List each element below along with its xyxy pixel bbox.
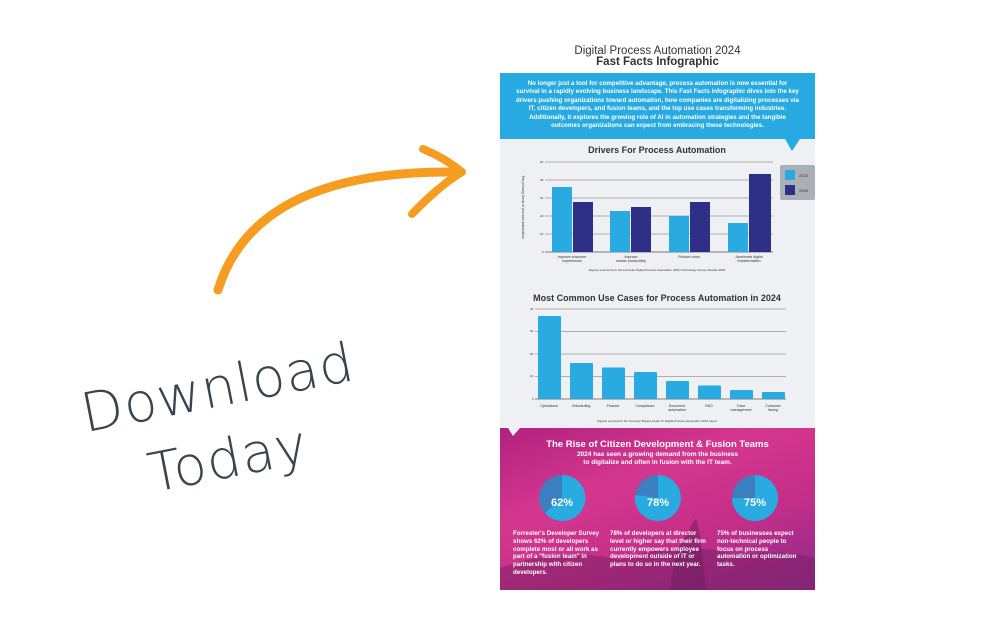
infographic [500, 40, 815, 590]
chart: drivers: Improve [625, 255, 637, 259]
intro box: No longer just a tool for competitive advantage, process automation is now essential for survival in a rapidly evolving business landscape. This Fast Facts infographic dives into the key drivers pushing organizations toward automation, how companies are digitalizing processes via IT, citizen developers, and fusion teams, and the top use cases transforming industries. Additionally, it explores the growing role of AI in automation strategies and the tangible outcomes organizations can expect from embracing these technologies. [516, 80, 799, 129]
stat texts: Forrester's Developer Survey shows 62% of developers complete most or all work as part of a "fusion team" in partnership with citizen developers. [513, 530, 599, 576]
pie 62%: 62% [551, 497, 573, 509]
title: Fast Facts Infographic [596, 56, 719, 68]
chart: drivers: Accelerate digital [735, 255, 763, 259]
panel: citizen development: 75% of businesses expect non-technical people to focus on process automation or optimization tasks. [717, 530, 796, 568]
chart: drivers: The primary focus of process automation [521, 175, 525, 239]
chart: drivers: 0 [542, 250, 544, 254]
chart: drivers: transformation [738, 259, 760, 263]
chart: use cases: 40 [530, 307, 534, 311]
call to action text: Download [76, 330, 359, 445]
chart: use cases: Most Common Use Cases for Process Automation in 2024 [533, 293, 781, 303]
chart: use cases: Customer [765, 404, 782, 408]
pie 78% [635, 475, 681, 521]
panel: citizen development: 78% of developers at director level or higher say that their firm currently empowers employee development outside of IT or plans to do so in the next year. [610, 530, 706, 568]
chart: use cases: R&D [705, 404, 713, 408]
call to action text [76, 330, 359, 505]
chart: use cases: Onboarding [572, 404, 590, 408]
chart: use cases: Compliance [636, 404, 654, 408]
chart: drivers: 20 [540, 214, 544, 218]
pie 78%: 78% [647, 497, 669, 509]
gray panel [500, 139, 815, 428]
chart: use cases [530, 293, 786, 423]
heading: The Rise of Citizen Development & Fusion Teams [546, 439, 769, 450]
chart: use cases: 10 [530, 374, 534, 378]
chart: use cases: 30 [530, 329, 534, 333]
legend: 2025 [799, 188, 809, 193]
chart: drivers: Figures sourced from the Forrester Digital Process Automation (DPA) Technology Survey Results 2025 [589, 268, 725, 272]
chart: use cases: Figures sourced for the Forrester Buyers Guide To Digital Process Automation 2024 report [597, 419, 717, 423]
chart: use cases: automation [668, 408, 686, 412]
chart: drivers: 30 [540, 196, 544, 200]
chart: drivers: worker productivity [616, 259, 646, 263]
chart: use cases: Operations [540, 404, 558, 408]
chart: drivers: Reduce costs [678, 255, 700, 259]
pie 75% [732, 475, 778, 521]
chart: drivers: Improve customer [558, 255, 587, 259]
chart: drivers: 10 [540, 232, 544, 236]
chart: drivers: 50 [540, 160, 544, 164]
chart: drivers: 40 [540, 178, 544, 182]
call to action text: Today [143, 412, 313, 505]
panel: citizen development: 2024 has seen a growing demand from the business [577, 451, 738, 458]
title [574, 45, 741, 68]
chart: use cases: 20 [530, 352, 534, 356]
chart: drivers: Drivers For Process Automation [588, 145, 726, 155]
panel: citizen development [500, 428, 815, 590]
pie 62% [539, 475, 585, 521]
title: Digital Process Automation 2024 [574, 45, 741, 57]
chart: use cases: management [731, 408, 751, 412]
chart: drivers: experiences [562, 259, 582, 263]
panel: citizen development: to digitalize and often in fusion with the IT team. [583, 459, 732, 466]
chart: use cases: Case [737, 404, 745, 408]
legend: 2023 [799, 173, 809, 178]
chart: drivers [521, 145, 815, 272]
pie 75%: 75% [744, 497, 766, 509]
chart: use cases: facing [768, 408, 778, 412]
legend [780, 165, 815, 200]
chart: use cases: 0 [532, 397, 534, 401]
chart: use cases: Finance [607, 404, 619, 408]
intro box [500, 73, 815, 139]
chart: use cases: Document [669, 404, 685, 408]
